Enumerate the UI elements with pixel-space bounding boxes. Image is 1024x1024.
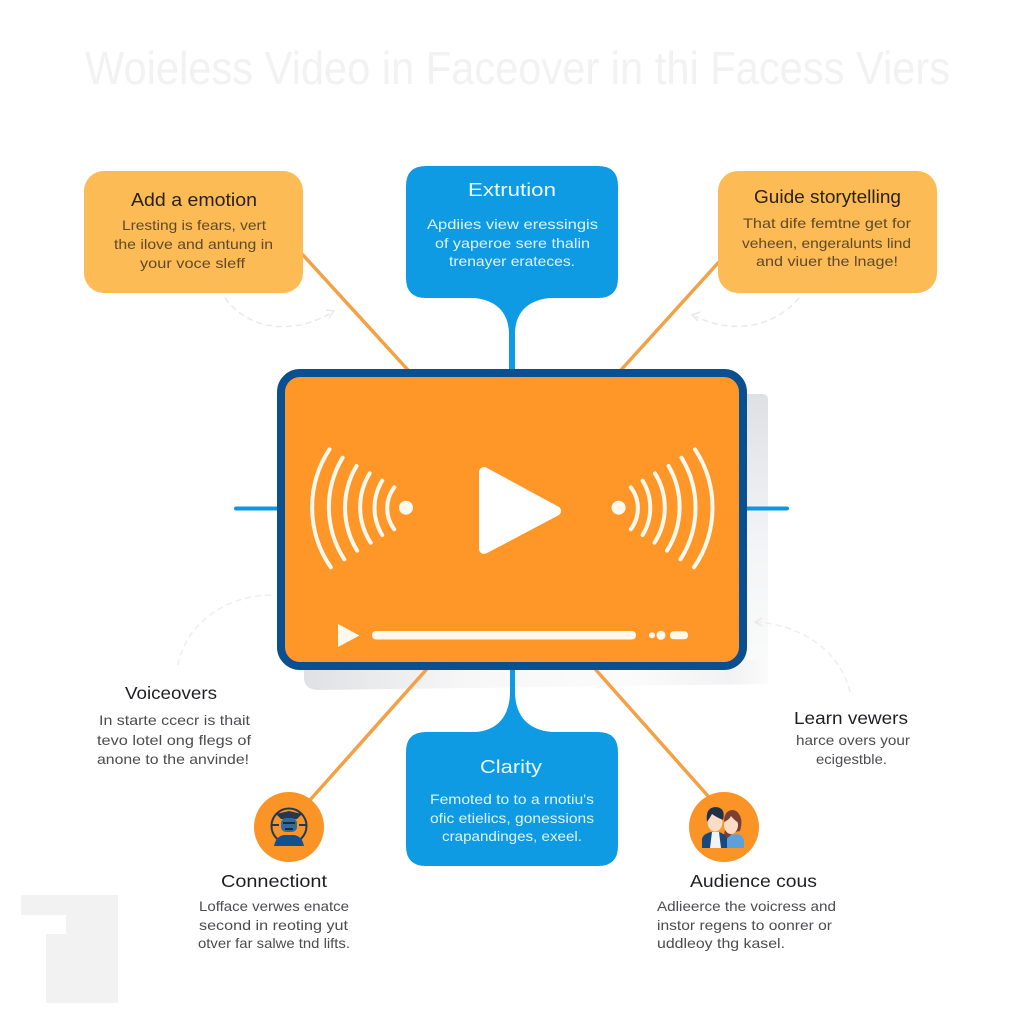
- body: connectiont: Lofface verwes enatce: [199, 898, 349, 914]
- body: voiceovers: anone to the anvinde!: [97, 751, 249, 767]
- text block: audience cous: [657, 871, 836, 951]
- body: audience cous: [657, 898, 836, 951]
- body: voiceovers: In starte ccecr is thait: [99, 712, 250, 728]
- panel: extrution: [406, 166, 618, 370]
- panel: clarity: [406, 668, 618, 866]
- body: connectiont: second in reoting yut: [199, 917, 348, 933]
- text block: learn vewers: [794, 708, 910, 767]
- grey corner mark: [21, 895, 118, 1003]
- heading: learn vewers: Learn vewers: [794, 708, 908, 728]
- body: audience cous: uddleoy thg kasel.: [657, 935, 785, 951]
- heading: add a emotion: Add a emotion: [131, 190, 257, 210]
- title: Woieless Video in Faceover in thi Facess Viers: [85, 42, 950, 94]
- icon: left sound waves: [312, 449, 413, 567]
- panel: guide storytelling: [718, 171, 937, 293]
- text block: guide storytelling: [742, 215, 911, 269]
- text block: guide storytelling: veheen, engeralunts lind: [742, 235, 911, 251]
- icon: audience: [689, 792, 759, 862]
- video player: [281, 373, 743, 666]
- text block: add a emotion: Lresting is fears, vert: [122, 217, 266, 233]
- dashed curved arrows: [178, 298, 850, 692]
- text block: extrution: trenayer erateces.: [449, 253, 575, 269]
- body: audience cous: instor regens to oonrer or: [657, 917, 832, 933]
- player frame: [281, 373, 743, 666]
- heading: clarity: Clarity: [480, 757, 542, 777]
- icon: right sound waves: [612, 449, 713, 567]
- text block: voiceovers: [97, 683, 251, 767]
- text block: extrution: of yaperoe sere thalin: [435, 235, 590, 251]
- body: connectiont: otver far salwe tnd lifts.: [198, 935, 350, 951]
- text block: add a emotion: your voce sleff: [140, 255, 245, 271]
- heading: guide storytelling: Guide storytelling: [754, 187, 901, 207]
- text block: extrution: [427, 216, 598, 269]
- text block: add a emotion: the ilove and antung in: [114, 236, 273, 252]
- body: connectiont: [198, 898, 350, 951]
- text block: clarity: Femoted to to a rnotiu's: [430, 791, 594, 807]
- text block: clarity: crapandinges, exeel.: [442, 828, 582, 844]
- body: learn vewers: ecigestble.: [816, 751, 887, 767]
- heading: connectiont: Connectiont: [221, 871, 327, 891]
- heading: audience cous: Audience cous: [690, 871, 817, 891]
- body: learn vewers: harce overs your: [796, 732, 910, 748]
- text block: add a emotion: [114, 217, 273, 271]
- heading: voiceovers: Voiceovers: [125, 683, 217, 703]
- text block: guide storytelling: That dife femtne get for: [743, 215, 911, 231]
- text block: extrution: Apdiies view eressingis: [427, 216, 598, 232]
- player shadow: [304, 394, 768, 690]
- playback controls: [338, 624, 688, 647]
- text block: clarity: [430, 791, 594, 844]
- heading: extrution: Extrution: [468, 180, 556, 200]
- text block: clarity: ofic etielics, gonessions: [430, 810, 594, 826]
- connector lines: [236, 255, 787, 800]
- body: voiceovers: tevo lotel ong flegs of: [97, 732, 251, 748]
- body: audience cous: Adlieerce the voicress and: [657, 898, 836, 914]
- text block: connectiont: [198, 871, 350, 951]
- icon: connection: [254, 792, 324, 862]
- body: learn vewers: [796, 732, 910, 767]
- text block: guide storytelling: and viuer the lnage!: [756, 253, 898, 269]
- panel: add a emotion: [84, 171, 303, 293]
- icon: play button: [484, 472, 556, 549]
- body: voiceovers: [97, 712, 251, 767]
